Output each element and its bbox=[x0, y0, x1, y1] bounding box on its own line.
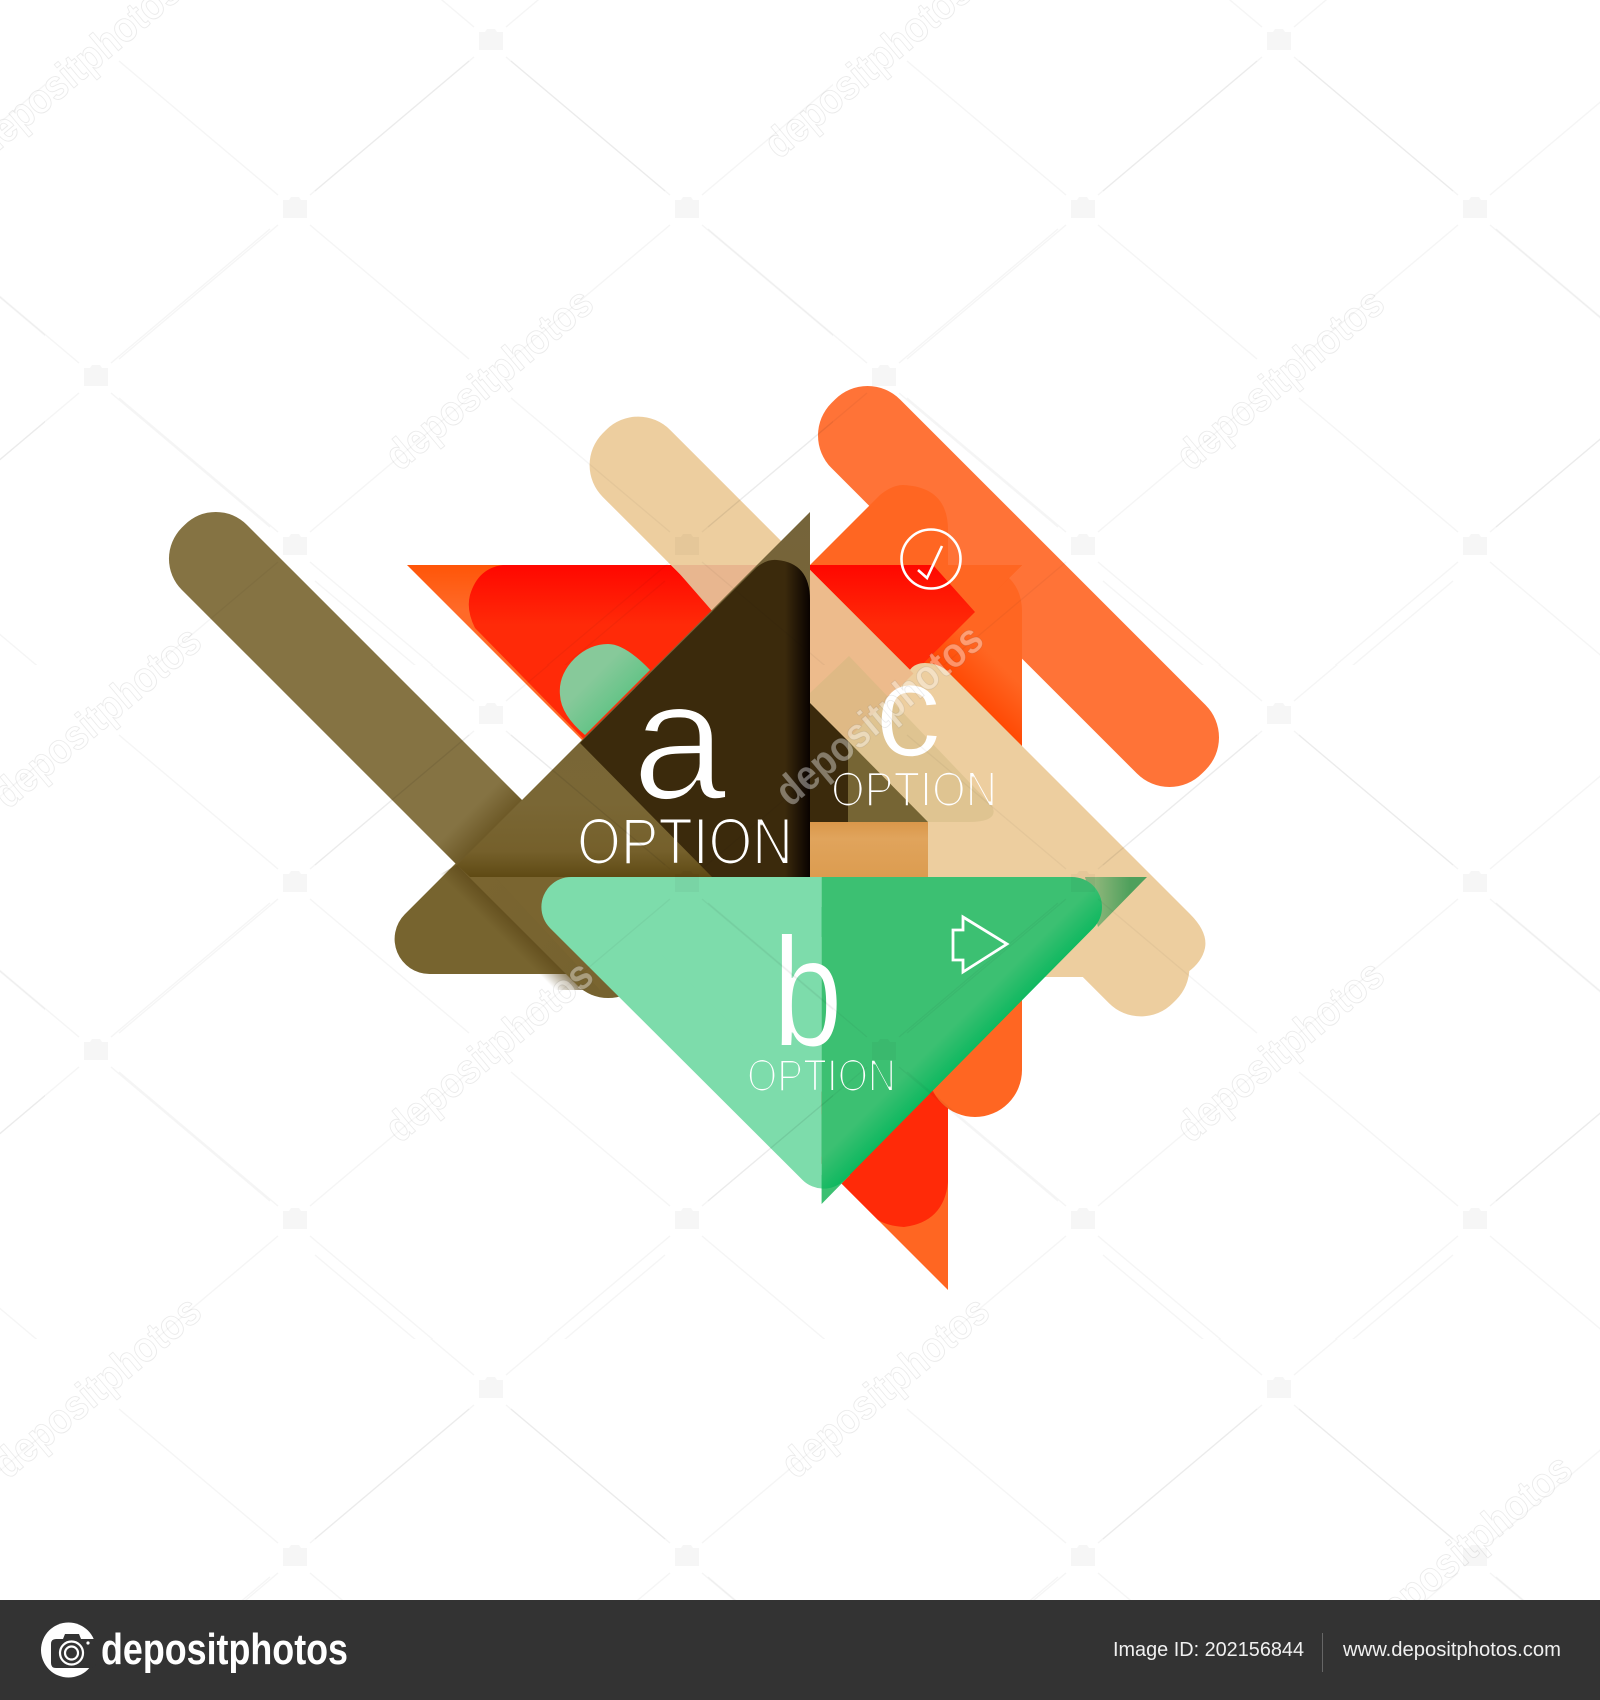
hot orange glow along beige edge bbox=[908, 612, 1022, 760]
lower red rounded shape bbox=[780, 1000, 948, 1227]
orange vertical rounded bar bbox=[928, 565, 1022, 1117]
green tip bottom bbox=[822, 1175, 850, 1204]
orange tip repaint on right bbox=[933, 565, 1022, 612]
olive triangle bbox=[457, 512, 810, 877]
icon: check mark in circle bbox=[902, 530, 960, 588]
translucent triangle around c bbox=[810, 656, 994, 822]
dark brown panel a bbox=[580, 560, 810, 877]
beige rounded triangle bbox=[905, 663, 1205, 977]
olive sliver under panel a bbox=[495, 877, 600, 990]
lower orange triangle bbox=[780, 1000, 948, 1290]
watermark text bottom center: depositphotos bbox=[772, 1286, 998, 1487]
icon: arrow bbox=[953, 917, 1007, 972]
footer divider bbox=[1322, 1633, 1323, 1672]
watermark text upper right: depositphotos bbox=[1167, 278, 1393, 479]
icon: depositphotos camera logo bbox=[41, 1622, 96, 1678]
watermark text upper middle: depositphotos bbox=[376, 278, 602, 479]
website url: www.depositphotos.com bbox=[1342, 1639, 1561, 1661]
label: OPTION c: OPTION bbox=[831, 763, 997, 817]
orange rounded shape behind check icon bbox=[810, 485, 948, 600]
dark wedge in c panel bbox=[810, 703, 848, 822]
label: OPTION b: OPTION bbox=[747, 1050, 896, 1101]
label: letter a: a bbox=[632, 646, 727, 836]
logo wordmark: depositphotos bbox=[101, 1625, 348, 1674]
green tip top right bbox=[1085, 877, 1147, 927]
footer bar bbox=[0, 1600, 1600, 1700]
image id: Image ID: 202156844 bbox=[1113, 1639, 1304, 1661]
lower brown rounded triangle bbox=[395, 863, 600, 974]
olive wedge in c panel bbox=[848, 741, 928, 822]
watermark text bottom right: depositphotos bbox=[1355, 1444, 1581, 1645]
light green half bbox=[541, 877, 822, 1188]
orange diagonal bar bbox=[799, 367, 1238, 806]
shadow on lower brown triangle bbox=[430, 863, 590, 990]
tan band below c panel bbox=[810, 822, 928, 877]
label: OPTION a: OPTION bbox=[577, 804, 793, 878]
red rounded shape bbox=[469, 565, 975, 872]
label: letter b: b bbox=[773, 905, 842, 1079]
panel: geometric artwork bbox=[151, 367, 1238, 1290]
green bump on red bbox=[560, 644, 650, 735]
label: letter c: c bbox=[875, 637, 942, 785]
watermark text over c panel: depositphotos bbox=[766, 614, 992, 815]
pink overlap left bbox=[672, 565, 760, 612]
dark green half bbox=[822, 877, 1102, 1189]
brown diagonal bar bbox=[151, 494, 673, 1016]
watermark text lower right: depositphotos bbox=[1167, 950, 1393, 1151]
watermark text lower middle: depositphotos bbox=[376, 950, 602, 1151]
pink overlap right bbox=[810, 570, 914, 740]
beige diagonal bar bbox=[571, 398, 1208, 1035]
left red triangle base bbox=[407, 565, 1022, 872]
